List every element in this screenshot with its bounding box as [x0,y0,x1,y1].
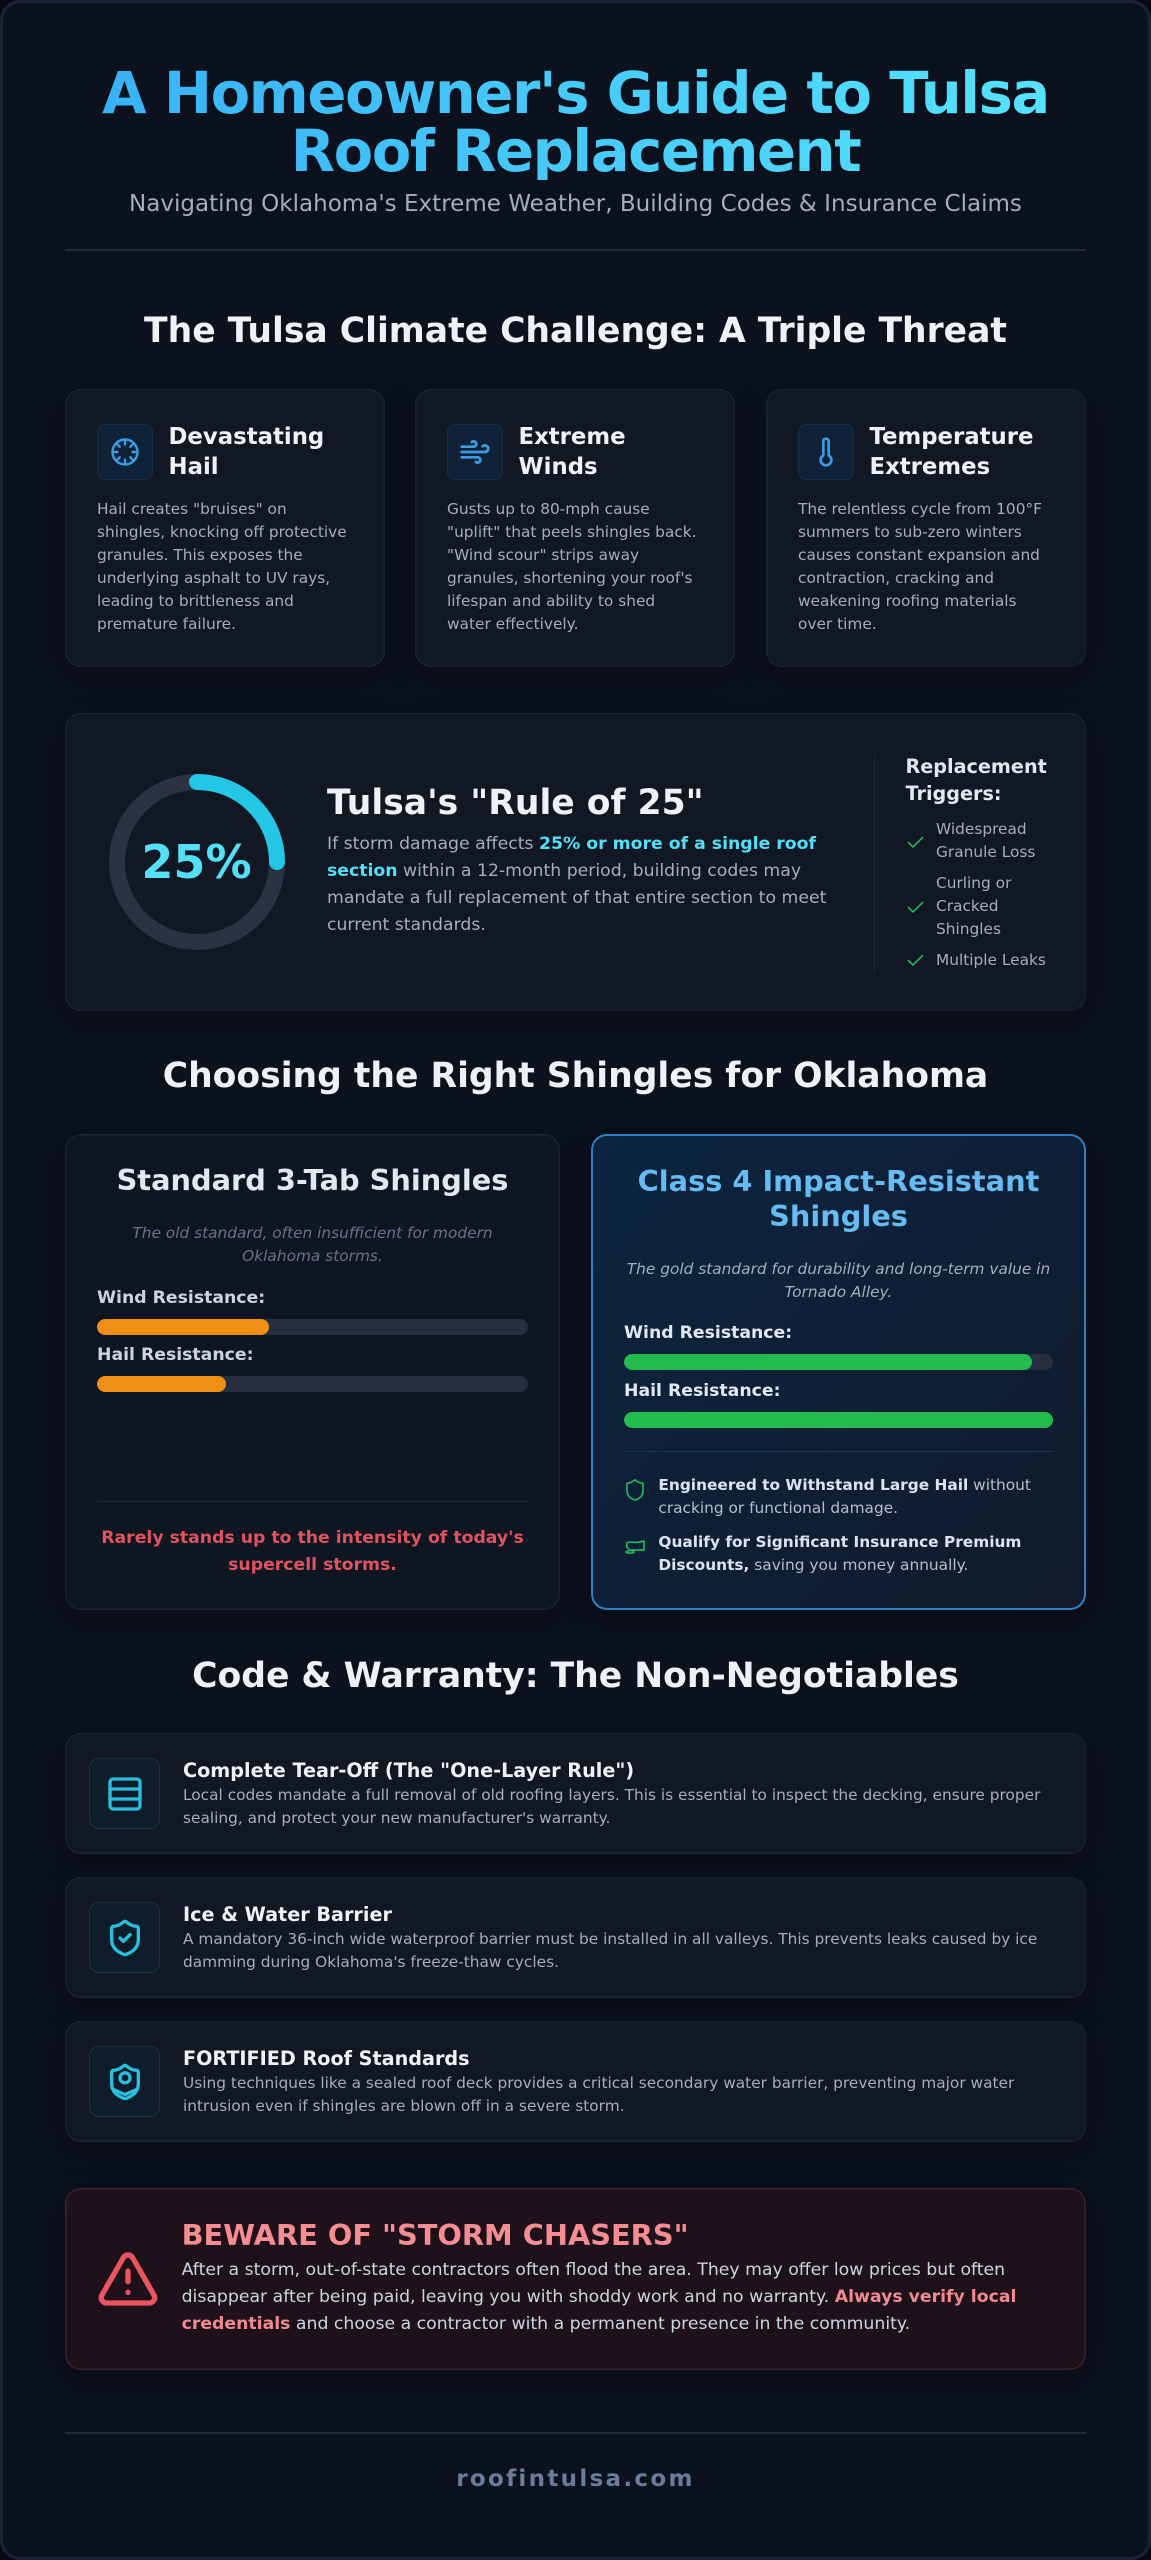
feature: insurance: Discounts, saving you money annually. [658,1556,968,1574]
card text: "Wind scour" strips away [447,546,639,564]
panel: tear-off [65,1733,1086,1854]
card text: water effectively. [447,615,578,633]
rule text: If storm damage affects 25% or more of a single roof [327,834,816,854]
card text: leading to brittleness and [97,592,294,610]
verdict [101,1528,524,1574]
hail label: Hail Resistance: [97,1345,253,1365]
item text: A mandatory 36-inch wide waterproof barrier must be installed in all valleys. This prevents leaks caused by ice [183,1930,1037,1948]
triggers heading [906,755,1047,805]
divider [874,754,875,972]
title: A Homeowner's Guide to Tulsa [102,60,1049,127]
header divider [65,249,1086,251]
card text: summers to sub-zero winters [798,523,1022,541]
card text: lifespan and ability to shed [447,592,655,610]
trigger: granule loss: Granule Loss [936,843,1035,861]
panel: temperature extremes [766,389,1086,667]
callout: storm chasers [65,2188,1086,2370]
card text: over time. [798,615,877,633]
card title: Extreme [518,424,626,450]
panel: fortified [65,2021,1086,2142]
icon: discount [625,1540,645,1554]
hail bar 100% [624,1412,1053,1428]
rule text: current standards. [327,915,486,935]
card title: Temperature [870,424,1033,450]
card text: Hail creates "bruises" on [97,500,287,518]
item title: FORTIFIED Roof Standards [183,2047,470,2070]
panel: standard 3-tab [65,1134,560,1610]
item text: Using techniques like a sealed roof deck provides a critical secondary water barrier, preventing major water [183,2074,1014,2092]
card text: contraction, cracking and [798,569,994,587]
icon: shield ring [89,2046,160,2117]
panel: ice and water [65,1877,1086,1998]
wind bar 95% [624,1354,1053,1370]
card text: Gusts up to 80-mph cause [447,500,650,518]
rule text [327,834,826,935]
trigger: curling: Shingles [936,920,1001,938]
icon: warning [98,2252,158,2306]
heading: choosing shingles: Choosing the Right Shingles for Oklahoma [163,1056,988,1096]
icon: hail [97,424,153,480]
card text: The relentless cycle from 100°F [798,500,1042,518]
card subtitle [627,1260,1050,1301]
card subtitle: Oklahoma storms. [242,1247,383,1265]
card text [97,500,347,633]
icon: shield check [89,1902,160,1973]
card text: "uplift" that peels shingles back. [447,523,697,541]
triggers heading: Replacement [906,755,1047,778]
hail bar 30% [97,1376,528,1392]
card subtitle [132,1224,493,1265]
trigger: curling: Cracked [936,897,998,915]
card text [798,500,1042,633]
title [65,65,1086,180]
triggers heading: Triggers: [906,782,1002,805]
trigger: granule loss [936,820,1035,861]
card text: underlying asphalt to UV rays, [97,569,330,587]
item text: damming during Oklahoma's freeze-thaw cycles. [183,1953,559,1971]
feature: large hail: Engineered to Withstand Large Hail without [658,1476,1031,1494]
card title: Hail [168,454,219,480]
card text: weakening roofing materials [798,592,1017,610]
card title [870,424,1033,480]
verdict: supercell storms. [228,1554,397,1574]
heading: climate challenge: The Tulsa Climate Challenge: A Triple Threat [144,311,1007,351]
card text: premature failure. [97,615,236,633]
icon: thermometer [798,424,854,480]
card title: Extremes [870,454,990,480]
wind bar 40% [97,1319,528,1335]
rule text: section within a 12-month period, building codes may [327,861,801,881]
item text: Local codes mandate a full removal of old roofing layers. This is essential to inspect the decking, ensure proper [183,1786,1040,1804]
feature: insurance [658,1533,1021,1574]
card text: granules, shortening your roof's [447,569,693,587]
card text: shingles, knocking off protective [97,523,347,541]
card subtitle: The old standard, often insufficient for modern [132,1224,493,1242]
icon: shield [626,1479,644,1501]
item text [183,1786,1040,1827]
card title: Shingles [769,1198,908,1232]
hail label: Hail Resistance: [624,1381,780,1401]
trigger: curling: Curling or [936,874,1011,892]
card text: granules. This exposes the [97,546,303,564]
wind label: Wind Resistance: [97,1288,265,1308]
card text: causes constant expansion and [798,546,1040,564]
card subtitle: The gold standard for durability and long-term value in [627,1260,1050,1278]
card text [447,500,697,633]
icon: wind [447,424,503,480]
item title: Ice & Water Barrier [183,1903,392,1926]
header [65,60,1086,251]
card title [518,424,626,480]
icon: check [908,902,924,913]
callout text: disappear after being paid, leaving you with shoddy work and no warranty. Always verify local [182,2286,1016,2306]
trigger: granule loss: Widespread [936,820,1027,838]
card title: Standard 3-Tab Shingles [117,1163,508,1197]
footer url: roofintulsa.com [456,2466,695,2492]
verdict: Rarely stands up to the intensity of today's [101,1528,524,1548]
trigger: curling [936,874,1012,938]
item text: sealing, and protect your new manufacturer's warranty. [183,1809,610,1827]
icon: check [908,836,924,848]
item text: intrusion even if shingles are blown off in a severe storm. [183,2097,625,2115]
donut chart: 25% [109,774,285,950]
panel: rule of 25 [65,713,1086,1011]
wind label: Wind Resistance: [624,1323,792,1343]
rule text: mandate a full replacement of that entire section to meet [327,888,826,908]
callout text: After a storm, out-of-state contractors often flood the area. They may offer low prices but often [182,2260,1005,2280]
card subtitle: Tornado Alley. [785,1283,892,1301]
panel: extreme winds [415,389,735,667]
card title [638,1164,1039,1232]
callout text: credentials and choose a contractor with a permanent presence in the community. [182,2314,910,2334]
card title: Winds [518,454,598,480]
feature: insurance: Qualify for Significant Insurance Premium [658,1533,1021,1551]
callout heading: BEWARE OF "STORM CHASERS" [182,2218,689,2252]
divider [624,1451,1053,1452]
panel: class 4 [591,1134,1086,1610]
subtitle: Navigating Oklahoma's Extreme Weather, Building Codes & Insurance Claims [129,190,1022,216]
icon: layers [89,1758,160,1829]
card title [168,424,324,480]
feature: large hail: cracking or functional damage. [658,1499,898,1517]
card title: Class 4 Impact-Resistant [638,1164,1039,1198]
icon: check [908,954,924,966]
item text [183,1930,1037,1971]
title: Roof Replacement [291,118,860,185]
divider [97,1501,528,1502]
callout text [182,2260,1016,2334]
footer [65,2432,1086,2502]
rule heading: Tulsa's "Rule of 25" [327,783,704,823]
item title: Complete Tear-Off (The "One-Layer Rule") [183,1759,634,1782]
trigger: leaks: Multiple Leaks [936,951,1046,969]
feature: large hail [658,1476,1031,1517]
heading: code and warranty: Code & Warranty: The Non-Negotiables [192,1656,959,1696]
card title: Devastating [168,424,324,450]
panel: devastating hail [65,389,384,667]
item text [183,2074,1014,2115]
donut value: 25% [141,835,252,889]
